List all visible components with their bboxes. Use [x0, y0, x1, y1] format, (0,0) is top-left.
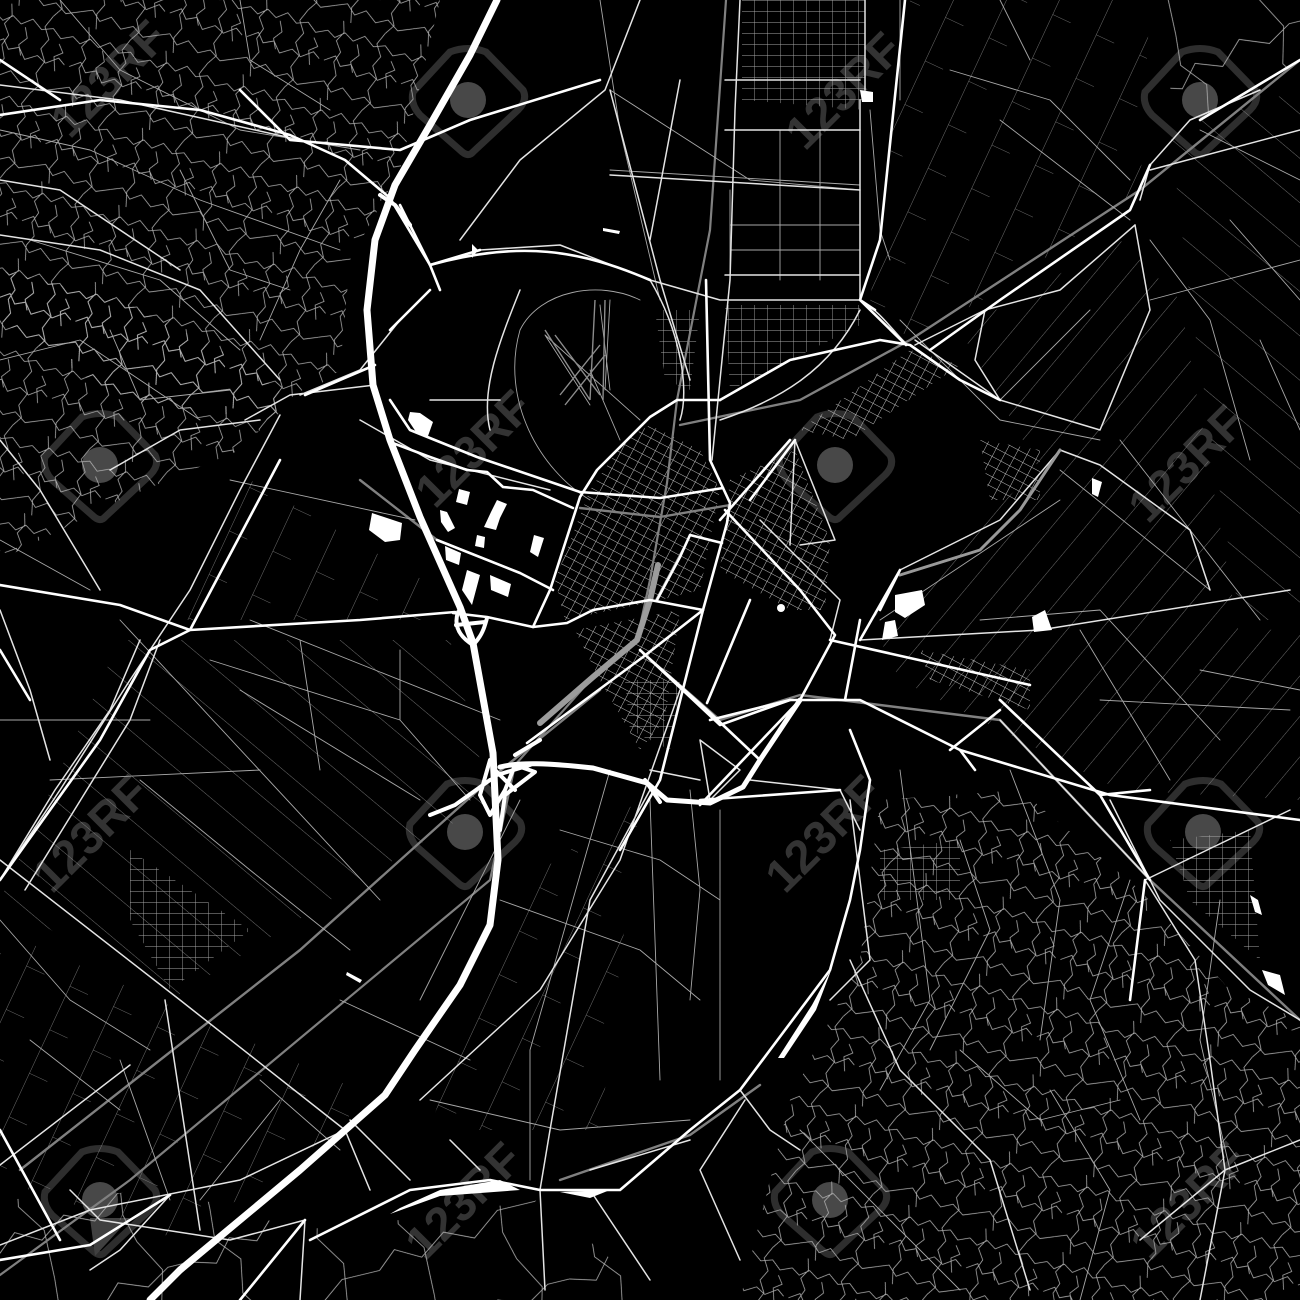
grid north: [742, 0, 865, 110]
main rail south-west to north: [0, 0, 726, 1275]
town grid west: [555, 425, 720, 620]
suburb south: [625, 680, 680, 750]
watermark icon lower right: [1147, 780, 1260, 887]
watermark icon top centre: [412, 48, 525, 155]
watermark text 3: 123RF: [1118, 395, 1255, 532]
building block west: [369, 513, 402, 542]
airfield runways: [545, 300, 605, 405]
watermark text 6: 123RF: [755, 765, 892, 902]
farmland west: [0, 640, 490, 1000]
interchange centre: [456, 612, 487, 645]
watermark icon middle centre: [779, 414, 892, 520]
watermark text 7: 123RF: [395, 1132, 532, 1269]
ring road: [500, 700, 800, 803]
suburb south-east: [880, 840, 960, 900]
river east: [778, 968, 832, 1058]
watermark text 1: 123RF: [775, 22, 912, 159]
rail south: [560, 1085, 760, 1180]
buildings: [346, 90, 1285, 995]
town grid east: [720, 450, 830, 610]
small blocks: [346, 90, 1285, 995]
river: [390, 1180, 520, 1214]
interchange south: [430, 740, 660, 830]
rail south-east: [643, 653, 1300, 1020]
watermark icon lower centre: [409, 780, 522, 887]
rail west side: [360, 480, 520, 573]
reservoirs: [882, 590, 925, 640]
grid north-east town: [800, 350, 960, 440]
watermark text 4: 123RF: [40, 10, 177, 147]
watermark icon top right: [1144, 48, 1257, 155]
motorway: [150, 0, 800, 1300]
river south: [560, 1190, 610, 1198]
runway lines: [545, 300, 605, 405]
interchange north: [380, 195, 410, 225]
hill paths top left: [0, 0, 440, 420]
yard: [540, 565, 658, 723]
hill paths bottom left: [0, 1190, 660, 1300]
watermark text 5: 123RF: [22, 765, 159, 902]
watermark text 8: 123RF: [1120, 1132, 1257, 1269]
watermark text 2: 123RF: [405, 380, 542, 517]
rail north-east: [680, 60, 1300, 425]
watermark icon middle left: [44, 414, 157, 520]
watermark icon bottom left: [44, 1148, 157, 1256]
watermark icon bottom centre: [774, 1148, 887, 1255]
hill paths bottom right: [740, 790, 1300, 1300]
farmland east: [870, 240, 1300, 800]
